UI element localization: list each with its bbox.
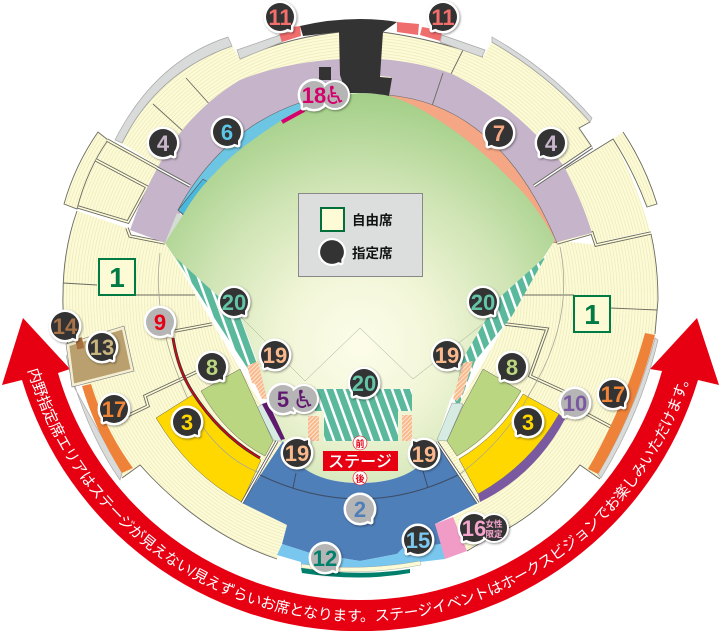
black small block [319, 67, 331, 80]
gray outer walkways [66, 35, 658, 480]
section 11 red blocks [279, 22, 442, 42]
marker 6 [213, 118, 241, 146]
marker 5 wheelchair [269, 385, 318, 414]
marker 8 right [498, 353, 526, 381]
hatched 19 blocks [247, 361, 473, 441]
marker 2 [346, 495, 374, 523]
infield lines [240, 316, 493, 381]
teal section 12 [301, 568, 410, 578]
arena inner line [260, 471, 460, 499]
green section 8 right [447, 369, 521, 456]
brown section 14 block [75, 337, 84, 349]
black top block [300, 19, 397, 96]
marker 7 [485, 119, 513, 147]
legend reserved label: 指定席 [352, 242, 392, 262]
mint strips [257, 403, 463, 441]
yellow section 3 right [459, 394, 559, 494]
marker 8 left: 8 [206, 355, 218, 380]
marker 17 right: 17 [601, 382, 625, 407]
marker 10: 10 [563, 391, 587, 416]
yellow section 3 left [156, 394, 261, 502]
marker 7: 7 [493, 121, 505, 146]
marker 2: 2 [354, 497, 366, 522]
orange section 17 right [588, 333, 655, 474]
banner text: 内野指定席エリアはステージが見えない/見えずらいお席となります。ステージイベントはホークスビジョンでお楽しみいただけます。 [27, 368, 688, 622]
striped area 20 left [176, 258, 266, 396]
purple section 10 strip [478, 414, 565, 502]
section 5 purple strip [262, 402, 285, 440]
section 1 label left [99, 259, 135, 295]
back mark [353, 471, 367, 485]
field [165, 93, 555, 483]
stand dividing lines [63, 32, 658, 559]
marker 16 women only: 限定 [485, 528, 503, 540]
green section 8 left [201, 369, 273, 456]
marker 3 right [514, 408, 542, 436]
marker 20 left: 20 [222, 290, 246, 315]
front mark [353, 436, 367, 450]
marker 17 left: 17 [102, 397, 126, 422]
marker 19 upper right: 19 [435, 343, 459, 368]
marker 20 right: 20 [471, 290, 495, 315]
marker 5 wheelchair: 5 [277, 387, 289, 412]
marker 12: 12 [313, 546, 337, 571]
section 1 label right: 1 [584, 299, 600, 330]
legend free seat swatch [321, 208, 344, 231]
marker 8 left [198, 353, 226, 381]
marker 16 women only: 女性 [485, 518, 503, 530]
marker 16 women only: 16 [462, 516, 486, 541]
marker 9 [146, 308, 174, 336]
light blue section 12 and 15 [277, 544, 445, 568]
section 18 magenta line [282, 110, 304, 122]
marker 15: 15 [406, 528, 430, 553]
blue arena section 2 [242, 441, 478, 561]
red section 9 line [173, 338, 260, 458]
purple sections 4 right [379, 59, 592, 242]
salmon section 7 [388, 95, 557, 243]
marker 8 right: 8 [506, 355, 518, 380]
marker 19 lower left: 19 [285, 441, 309, 466]
marker 3 left [173, 408, 201, 436]
front mark: 前 [355, 437, 365, 450]
marker 6: 6 [221, 120, 233, 145]
legend [298, 194, 422, 276]
legend free seat label: 自由席 [352, 209, 392, 229]
blue section 6 [178, 102, 312, 222]
legend reserved bubble [320, 240, 344, 264]
marker 4 right: 4 [545, 131, 558, 156]
marker 4 left: 4 [157, 131, 170, 156]
section 6 dark block [178, 179, 211, 215]
brown section 13 [68, 328, 132, 385]
marker 4 right [537, 129, 565, 157]
stage [323, 448, 398, 472]
marker 20 centre: 20 [352, 371, 376, 396]
section 1 label right [574, 296, 610, 332]
marker 19 upper left: 19 [263, 343, 287, 368]
purple sections 4 left [130, 59, 346, 243]
cream strip [301, 561, 421, 572]
back mark: 後 [355, 472, 365, 485]
cream free seating stands [63, 32, 658, 558]
marker 18 wheelchair [300, 81, 349, 110]
marker 11 left: 11 [268, 5, 292, 30]
marker 18 wheelchair: 18 [302, 83, 326, 108]
marker 9: 9 [154, 310, 166, 335]
marker 11 right: 11 [431, 5, 455, 30]
marker 5 wheelchair: ♿ [293, 385, 315, 414]
marker 13: 13 [90, 335, 114, 360]
marker 4 left [149, 129, 177, 157]
marker 16 women only [460, 514, 508, 542]
gray corner [166, 213, 184, 243]
marker 3 right: 3 [522, 410, 534, 435]
striped area 20 centre [312, 389, 412, 441]
marker 3 left: 3 [181, 410, 193, 435]
marker 18 wheelchair: ♿ [324, 81, 346, 110]
marker 14: 14 [53, 314, 78, 339]
orange section 17 left [82, 384, 133, 473]
stage label: ステージ [328, 448, 392, 472]
marker 19 lower right: 19 [412, 442, 436, 467]
section 1 label left: 1 [109, 262, 125, 293]
pink section 16 [435, 517, 467, 559]
striped area 20 right [453, 256, 546, 403]
